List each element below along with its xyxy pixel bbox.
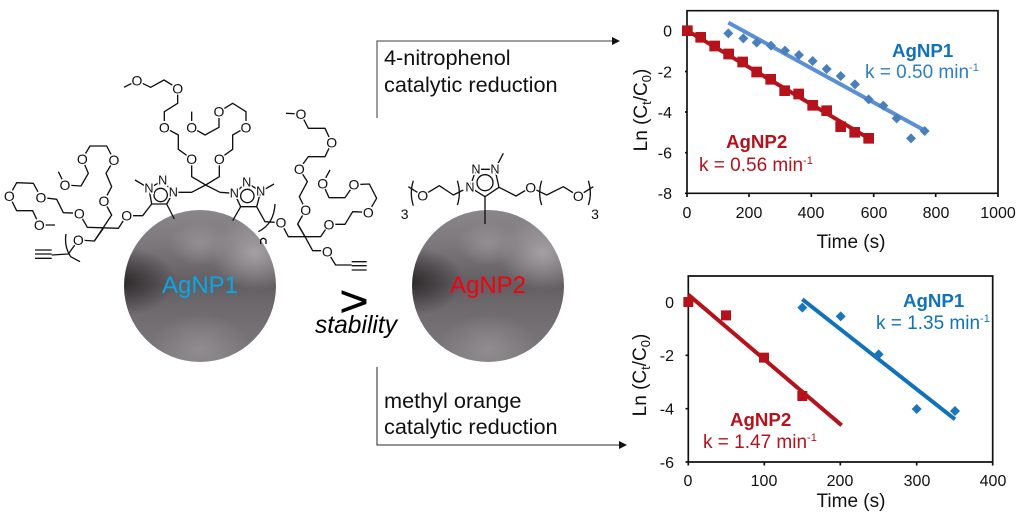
label: AgNP1 rate: k = 0.50 min xyxy=(865,62,969,83)
molecule: AgNP1 dendritic ligand, left and centre: O xyxy=(36,189,47,205)
y-axis title: ) xyxy=(630,334,651,340)
label: AgNP1 rate xyxy=(865,40,979,83)
y-axis tick labels: -4 xyxy=(660,402,674,418)
label: AgNP2 rate xyxy=(699,131,813,176)
molecule: AgNP1 dendritic ligand, left and centre: N xyxy=(158,174,167,188)
x-axis tick labels xyxy=(684,473,1006,490)
label: AgNP2 rate: AgNP2 xyxy=(726,131,787,152)
y-axis title: /C xyxy=(631,82,652,101)
x-axis tick labels: 0 xyxy=(683,205,692,222)
molecule: AgNP1 dendritic ligand, left and centre: O xyxy=(214,104,225,120)
comparison: stability greater-than sign: > xyxy=(339,277,369,325)
molecule: AgNP1 dendritic ligand, right branch: O xyxy=(317,175,328,191)
arrow: to methyl orange chart xyxy=(377,367,627,449)
x-axis tick labels: 600 xyxy=(861,205,887,222)
molecule: AgNP1 dendritic ligand, left and centre: N xyxy=(169,185,178,199)
molecule: AgNP1 dendritic ligand, left and centre: O xyxy=(4,188,15,204)
text: 4-nitrophenol catalytic reduction: catalytic reduction xyxy=(384,72,558,97)
y-axis tick labels xyxy=(660,295,674,472)
label: AgNP1 rate xyxy=(876,290,990,334)
molecule: AgNP1 dendritic ligand, left and centre: O xyxy=(186,119,197,135)
y-axis title: /C xyxy=(630,347,651,366)
label: AgNP1 rate: AgNP1 xyxy=(903,290,964,311)
plot frame and ticks xyxy=(685,11,998,197)
molecule: AgNP1 dendritic ligand, right branch: O xyxy=(324,216,335,232)
comparison: stability greater-than sign: stability xyxy=(315,312,399,339)
molecule: AgNP1 dendritic ligand, right branch: O xyxy=(276,215,287,231)
molecule: AgNP1 dendritic ligand, left and centre: O xyxy=(121,208,132,224)
x-axis tick labels: 1000 xyxy=(980,205,1016,222)
molecule: AgNP1 dendritic ligand, left and centre: O xyxy=(132,73,143,89)
molecule: AgNP1 dendritic ligand, right branch: O xyxy=(322,244,333,260)
chart: methyl orange kinetics xyxy=(630,276,1006,512)
molecule: AgNP1 dendritic ligand, left and centre: N xyxy=(256,185,265,199)
molecule: AgNP2 triazole ligand: O xyxy=(573,188,584,204)
label: AgNP2 rate: k = 1.47 min xyxy=(703,432,807,453)
molecule: AgNP1 dendritic ligand, left and centre xyxy=(4,73,274,262)
label: AgNP1 rate: AgNP1 xyxy=(892,40,953,61)
x-axis tick labels: 200 xyxy=(736,205,762,222)
series: AgNP2 squares and fit xyxy=(682,25,874,144)
molecule: AgNP2 triazole ligand: N xyxy=(471,162,481,176)
text: 4-nitrophenol catalytic reduction xyxy=(384,45,558,97)
y-axis title: ) xyxy=(631,69,652,75)
arrow: to 4-nitrophenol chart xyxy=(377,37,620,118)
molecule: AgNP1 dendritic ligand, right branch: O xyxy=(349,177,360,193)
y-axis tick labels: -8 xyxy=(658,186,672,203)
x-axis tick labels: 200 xyxy=(827,473,853,490)
series: AgNP2 squares and fit xyxy=(683,295,842,425)
nanoparticle: AgNP2 sphere xyxy=(412,210,564,362)
molecule: AgNP1 dendritic ligand, left and centre: N xyxy=(144,181,154,195)
y-axis tick labels xyxy=(658,24,672,203)
molecule: AgNP1 dendritic ligand, right branch xyxy=(257,106,377,270)
molecule: AgNP1 dendritic ligand, left and centre: O xyxy=(186,151,197,167)
text: 4-nitrophenol catalytic reduction: 4-nitrophenol xyxy=(384,45,511,70)
molecule: AgNP1 dendritic ligand, left and centre: O xyxy=(73,232,84,248)
y-axis tick labels: 0 xyxy=(663,24,672,40)
x-axis title: Time (s) xyxy=(817,232,885,253)
y-axis tick labels: -6 xyxy=(660,455,674,472)
molecule: AgNP1 dendritic ligand, left and centre: O xyxy=(77,151,88,167)
y-axis title: t xyxy=(638,366,653,370)
series: AgNP1 diamonds and fit xyxy=(797,299,960,419)
y-axis title: Ln (C xyxy=(630,370,651,416)
x-axis tick labels: 400 xyxy=(980,473,1006,490)
molecule: AgNP2 triazole ligand: 3 xyxy=(401,206,409,222)
chart: 4-nitrophenol kinetics xyxy=(631,11,1016,253)
molecule: AgNP1 dendritic ligand, left and centre: O xyxy=(109,152,120,168)
molecule: AgNP2 triazole ligand: N xyxy=(490,162,500,176)
molecule: AgNP2 triazole ligand: O xyxy=(417,188,428,204)
molecule: AgNP1 dendritic ligand, right branch: O xyxy=(300,202,311,218)
nanoparticle: AgNP1 sphere xyxy=(124,210,276,362)
y-axis title: 0 xyxy=(639,75,654,82)
text: methyl orange catalytic reduction: catalytic reduction xyxy=(384,414,558,439)
y-axis tick labels: 0 xyxy=(665,295,674,312)
molecule: AgNP1 dendritic ligand, left and centre: O xyxy=(214,151,225,167)
y-axis title: t xyxy=(639,101,654,105)
plot frame and ticks xyxy=(686,276,993,466)
molecule: AgNP2 triazole ligand: 3 xyxy=(591,206,599,222)
x-axis title: Time (s) xyxy=(817,491,885,512)
y-axis tick labels: -2 xyxy=(660,348,674,365)
label: AgNP2 rate: k = 0.56 min xyxy=(699,155,803,176)
molecule: AgNP1 dendritic ligand, left and centre: N xyxy=(230,186,239,200)
label: AgNP2 rate xyxy=(703,409,817,453)
label: AgNP2 rate: AgNP2 xyxy=(730,409,791,430)
nanoparticle: AgNP1 sphere: AgNP1 xyxy=(162,272,238,299)
molecule: AgNP1 dendritic ligand, right branch: O xyxy=(296,106,307,122)
label: AgNP2 rate: -1 xyxy=(803,155,813,167)
x-axis tick labels: 100 xyxy=(751,473,777,490)
x-axis tick labels xyxy=(683,205,1016,222)
molecule: AgNP1 dendritic ligand, right branch: O xyxy=(363,204,374,220)
label: AgNP2 rate: -1 xyxy=(807,432,817,444)
y-axis title: 0 xyxy=(638,340,653,347)
molecule: AgNP2 triazole ligand: N xyxy=(465,180,475,194)
molecule: AgNP1 dendritic ligand, left and centre: N xyxy=(242,175,251,189)
x-axis tick labels: 0 xyxy=(684,473,693,490)
molecule: AgNP1 dendritic ligand, right branch: O xyxy=(294,161,305,177)
text: methyl orange catalytic reduction xyxy=(384,388,558,439)
nanoparticle: AgNP2 sphere: AgNP2 xyxy=(450,272,526,299)
molecule: AgNP1 dendritic ligand, left and centre: O xyxy=(159,119,170,135)
molecule: AgNP1 dendritic ligand, left and centre: O xyxy=(60,177,71,193)
molecule: AgNP2 triazole ligand xyxy=(401,153,599,224)
y-axis tick labels: -6 xyxy=(658,146,672,162)
molecule: AgNP2 triazole ligand: O xyxy=(525,179,536,195)
comparison: stability greater-than sign xyxy=(315,277,399,339)
x-axis tick labels: 400 xyxy=(798,205,824,222)
label: AgNP1 rate: -1 xyxy=(969,62,979,74)
molecule: AgNP1 dendritic ligand, left and centre: O xyxy=(172,80,183,96)
molecule: AgNP1 dendritic ligand, left and centre: O xyxy=(34,217,45,233)
molecule: AgNP1 dendritic ligand, right branch: O xyxy=(326,135,337,151)
molecule: AgNP1 dendritic ligand, left and centre: O xyxy=(241,119,252,135)
x-axis tick labels: 300 xyxy=(904,473,930,490)
y-axis tick labels: -4 xyxy=(658,105,672,122)
label: AgNP1 rate: -1 xyxy=(980,313,990,325)
series: AgNP1 diamonds and fit xyxy=(723,23,930,143)
molecule: AgNP1 dendritic ligand, left and centre: O xyxy=(99,193,110,209)
x-axis tick labels: 800 xyxy=(923,205,949,222)
y-axis title: Ln (C xyxy=(631,105,652,151)
text: methyl orange catalytic reduction: methyl orange xyxy=(384,388,521,413)
molecule: AgNP1 dendritic ligand, left and centre: O xyxy=(74,205,85,221)
label: AgNP1 rate: k = 1.35 min xyxy=(876,313,980,334)
y-axis tick labels: -2 xyxy=(658,64,672,82)
